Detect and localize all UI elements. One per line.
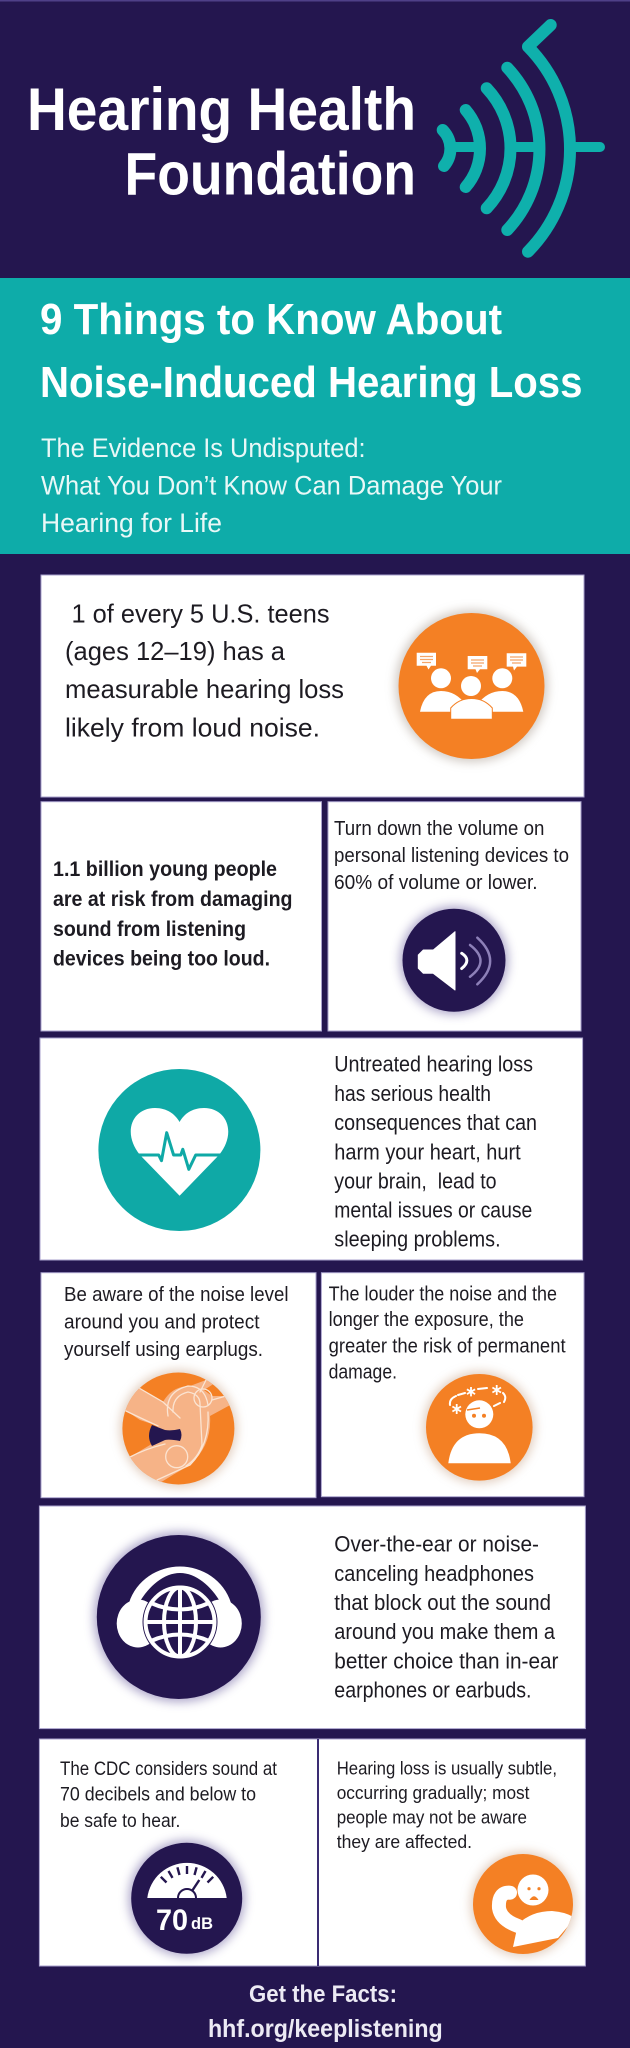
icon: person with hand to head	[470, 1852, 576, 1956]
panel: louder the noise	[321, 1273, 584, 1497]
text: health consequences: mental issues or cause	[334, 1197, 532, 1222]
text: safe decibel level: be safe to hear.	[60, 1811, 180, 1832]
icon: sound wave logo mark	[443, 25, 600, 252]
icon: 70 dB gauge	[129, 1840, 245, 1956]
subtitle	[41, 433, 502, 538]
text: volume advice: Turn down the volume on	[334, 818, 544, 840]
icon: earplug in ear	[110, 1370, 237, 1487]
gauge reading: dB	[191, 1914, 213, 1933]
text: exposure warning: damage.	[329, 1361, 397, 1383]
text: exposure warning: The louder the noise and the	[329, 1283, 557, 1305]
footer call to action: hhf.org/keeplistening	[208, 2015, 443, 2043]
text: headphones recommendation: Over-the-ear or noise-	[334, 1532, 539, 1557]
text: gradual hearing loss	[337, 1758, 557, 1852]
text: health consequences: harm your heart, hurt	[334, 1139, 521, 1164]
text: health consequences: Untreated hearing loss	[334, 1052, 533, 1077]
panel: 1.1 billion young people	[41, 802, 322, 1031]
text: headphones recommendation: earphones or earbuds.	[334, 1678, 532, 1702]
text: exposure warning: greater the risk of permanent	[329, 1335, 566, 1357]
panel: CDC 70 decibels	[39, 1739, 318, 1966]
text: bold risk statement	[53, 858, 292, 971]
text: safe decibel level	[60, 1759, 278, 1832]
panel: be aware of noise level	[41, 1273, 316, 1498]
text: earplug advice: Be aware of the noise level	[64, 1284, 288, 1306]
text: gradual hearing loss: they are affected.	[337, 1832, 472, 1852]
panel: hearing loss is subtle	[318, 1739, 585, 1966]
text: bold risk statement: 1.1 billion young people	[53, 858, 277, 881]
text: teen statistic: likely from loud noise.	[65, 713, 320, 743]
icon: speaker	[400, 906, 508, 1014]
text: exposure warning	[329, 1283, 566, 1383]
text: earplug advice: around you and protect	[64, 1311, 260, 1333]
text: gradual hearing loss: occurring gradually; most	[337, 1783, 530, 1803]
text: teen statistic: (ages 12–19) has a	[65, 636, 286, 666]
text: health consequences	[334, 1052, 537, 1252]
text: headphones recommendation: canceling headphones	[334, 1561, 534, 1586]
text: headphones recommendation: around you make them a	[334, 1619, 556, 1644]
panel: headphones advice	[39, 1506, 585, 1729]
icon: group of people talking	[396, 610, 548, 762]
footer call to action	[208, 1981, 443, 2043]
text: health consequences: your brain, lead to	[334, 1168, 497, 1193]
text: teen statistic: 1 of every 5 U.S. teens	[72, 599, 330, 629]
text: earplug advice	[64, 1284, 288, 1361]
logo wordmark	[27, 76, 416, 208]
text: teen statistic	[65, 599, 344, 743]
subtitle: Hearing for Life	[41, 508, 222, 538]
text: safe decibel level: 70 decibels and below to	[60, 1785, 256, 1806]
header: foundation logo	[27, 25, 600, 252]
subtitle: The Evidence Is Undisputed:	[41, 433, 366, 463]
logo wordmark: Foundation	[124, 140, 416, 208]
gauge reading: 70	[156, 1904, 188, 1937]
text: headphones recommendation: that block out the sound	[334, 1590, 551, 1615]
main title	[40, 295, 582, 407]
text: teen statistic: measurable hearing loss	[65, 674, 344, 704]
gauge reading	[156, 1904, 213, 1937]
text: earplug advice: yourself using earplugs.	[64, 1339, 263, 1361]
text: gradual hearing loss: Hearing loss is usually subtle,	[337, 1758, 557, 1778]
main title: Noise-Induced Hearing Loss	[40, 358, 582, 407]
icon: globe wearing headphones	[94, 1532, 264, 1702]
teal title band	[0, 278, 630, 554]
text: volume advice: personal listening devices to	[334, 845, 569, 867]
text: bold risk statement: are at risk from damaging	[53, 888, 292, 911]
icon: dizzy person	[423, 1371, 535, 1483]
text: safe decibel level: The CDC considers sound at	[60, 1759, 278, 1780]
logo wordmark: Hearing Health	[27, 76, 416, 143]
text: bold risk statement: sound from listening	[53, 918, 246, 941]
text: exposure warning: longer the exposure, the	[329, 1309, 524, 1331]
icon: heart with pulse	[98, 1069, 260, 1231]
text: health consequences: has serious health	[334, 1081, 491, 1106]
text: gradual hearing loss: people may not be aware	[337, 1807, 527, 1827]
footer call to action: Get the Facts:	[249, 1981, 397, 2008]
text: headphones recommendation	[334, 1532, 558, 1702]
text: health consequences: sleeping problems.	[334, 1227, 501, 1252]
panel: 1 of every 5 teens	[41, 575, 584, 797]
main title: 9 Things to Know About	[40, 295, 502, 344]
text: volume advice	[334, 818, 569, 894]
panel: untreated hearing loss	[40, 1038, 583, 1260]
subtitle: What You Don’t Know Can Damage Your	[41, 470, 502, 500]
panel: turn down the volume	[328, 802, 581, 1031]
text: headphones recommendation: better choice than in-ear	[334, 1648, 558, 1674]
text: health consequences: consequences that can	[334, 1110, 537, 1135]
text: volume advice: 60% of volume or lower.	[334, 872, 538, 894]
text: bold risk statement: devices being too loud.	[53, 948, 270, 971]
